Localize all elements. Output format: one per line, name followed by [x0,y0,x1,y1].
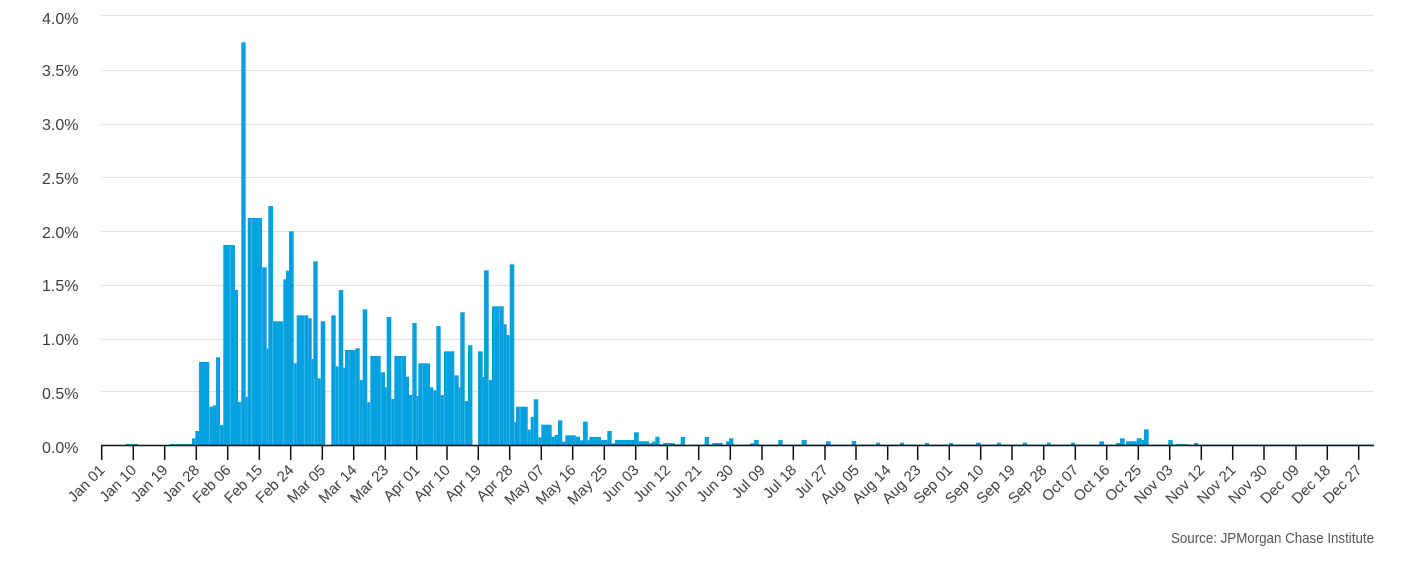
x axis date labels: Jul 27 [792,462,832,502]
x axis date labels: Dec 18 [1288,462,1334,507]
x axis date labels: Sep 01 [910,462,956,507]
x axis date labels: Aug 23 [879,462,925,507]
source note: Source: JPMorgan Chase Institute [1171,530,1374,547]
x axis date labels: Feb 24 [252,462,298,507]
x axis date labels: Oct 07 [1039,462,1082,505]
x axis date labels: Apr 01 [380,462,424,505]
x axis date labels: May 07 [501,462,548,509]
y axis labels: 4.0% [42,11,78,28]
y axis labels: 1.0% [42,332,78,349]
x axis date labels: May 16 [533,462,580,509]
x axis date labels: Sep 28 [1005,462,1051,507]
x axis date labels: Jul 09 [729,462,769,502]
x axis date labels: Feb 06 [189,462,235,507]
x axis date labels: Jun 03 [599,462,643,506]
x axis date labels: Feb 15 [221,462,266,507]
x axis date labels: Apr 28 [473,462,517,505]
x axis date labels: Sep 10 [942,462,988,507]
x axis date labels [65,462,1366,509]
y axis labels: 3.0% [42,117,78,134]
y axis labels [42,11,78,457]
x axis date labels: Jul 18 [760,462,800,502]
x axis date labels: Jan 19 [128,462,172,506]
x axis date labels: Jun 12 [630,462,674,506]
x axis date labels: Oct 16 [1070,462,1114,505]
x axis date labels: Apr 19 [442,462,485,505]
x axis date labels: Nov 03 [1131,462,1177,507]
y axis labels: 3.5% [42,63,78,80]
y axis labels: 0.5% [42,386,78,403]
x axis date labels: Mar 23 [347,462,392,507]
y axis labels: 0.0% [42,440,78,457]
x axis date labels: May 25 [564,462,611,509]
x axis date labels: Mar 14 [315,462,361,507]
x axis date labels: Nov 12 [1162,462,1208,507]
x axis date labels: Jan 28 [159,462,203,506]
x axis date labels: Dec 27 [1320,462,1366,507]
x axis date labels: Dec 09 [1257,462,1303,507]
x axis date labels: Jun 21 [662,462,706,506]
x axis date labels: Apr 10 [411,462,454,505]
x axis date labels: Aug 14 [849,462,895,507]
x axis date labels: Jan 01 [65,462,109,506]
x axis date labels: Oct 25 [1102,462,1145,505]
x axis date labels: Sep 19 [973,462,1019,507]
x axis date labels: Nov 30 [1225,462,1271,507]
y axis labels: 1.5% [42,278,78,295]
x axis date labels: Jan 10 [96,462,140,506]
x axis date labels: Nov 21 [1194,462,1240,507]
x axis line and ticks [101,445,1374,460]
x axis date labels: Mar 05 [284,462,329,507]
y axis labels: 2.5% [42,171,78,188]
y axis labels: 2.0% [42,225,78,242]
x axis date labels: Jun 30 [693,462,737,506]
bars [126,42,1374,445]
x axis date labels: Aug 05 [817,462,863,507]
